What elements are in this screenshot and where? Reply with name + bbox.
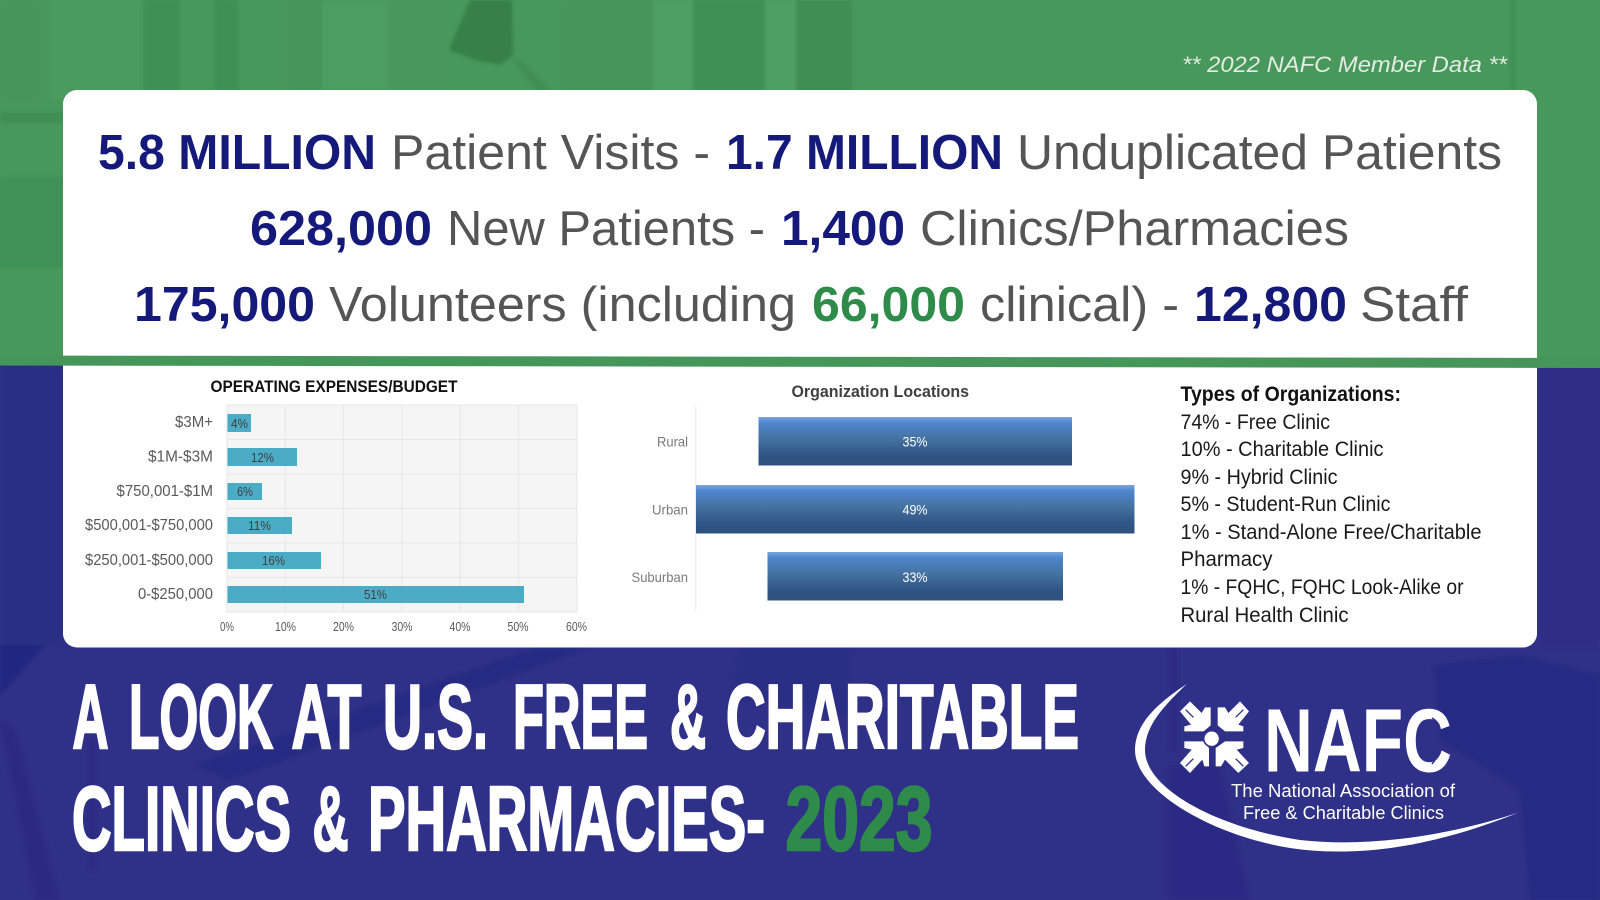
budget bars xyxy=(228,414,524,603)
types of organizations list: 5% - Student-Run Clinic xyxy=(1180,493,1390,516)
green photo background xyxy=(0,0,1600,366)
stat line 1: Unduplicated Patients xyxy=(1017,126,1502,180)
x axis labels: 60% xyxy=(566,620,587,634)
stat line 1: 5.8 MILLION xyxy=(98,126,376,180)
stat line 3: Volunteers (including xyxy=(329,278,796,332)
location labels: Urban xyxy=(652,502,688,518)
stat line 3 xyxy=(134,278,1468,332)
title line 2: & xyxy=(312,769,348,870)
stat line 2: Clinics/Pharmacies xyxy=(920,202,1349,256)
location labels: Suburban xyxy=(632,569,688,585)
title line 2: 2023 xyxy=(786,769,932,870)
budget value labels: 51% xyxy=(364,587,387,602)
types of organizations list: 74% - Free Clinic xyxy=(1180,411,1330,434)
logo tagline: Free & Charitable Clinics xyxy=(1243,802,1444,823)
blue photo background xyxy=(0,365,1600,900)
location values: 49% xyxy=(902,502,928,518)
data source note: ** 2022 NAFC Member Data ** xyxy=(1182,52,1509,77)
title line 1: CHARITABLE xyxy=(726,667,1079,768)
budget value labels: 4% xyxy=(231,416,248,431)
bar chart: operating expenses/budget xyxy=(85,377,587,634)
types of organizations list: Types of Organizations: xyxy=(1180,383,1401,406)
types of organizations list xyxy=(1180,383,1482,627)
x axis labels: 0% xyxy=(220,620,234,634)
white card xyxy=(63,90,1537,648)
stat line 2: 628,000 xyxy=(250,202,432,256)
x axis labels: 30% xyxy=(392,620,412,634)
types of organizations list: 1% - Stand-Alone Free/Charitable xyxy=(1180,521,1482,544)
location values: 33% xyxy=(902,569,928,585)
x axis labels: 10% xyxy=(275,620,296,634)
location values xyxy=(902,434,928,585)
x axis labels: 50% xyxy=(508,620,528,634)
stat line 3: 12,800 xyxy=(1194,278,1347,332)
budget category labels: $750,001-$1M xyxy=(116,483,213,500)
key statistics xyxy=(98,126,1502,332)
budget category labels: $1M-$3M xyxy=(148,448,213,466)
green divider bar xyxy=(0,356,1600,368)
types of organizations list: 10% - Charitable Clinic xyxy=(1180,438,1384,461)
bar chart: organization locations xyxy=(632,382,1134,610)
logo tagline: The National Association of xyxy=(1231,780,1456,801)
logo swoosh xyxy=(1135,684,1518,852)
budget category labels: 0-$250,000 xyxy=(138,586,213,603)
title line 1: FREE xyxy=(513,667,648,768)
budget category labels: $250,001-$500,000 xyxy=(85,552,213,569)
chart title: OPERATING EXPENSES/BUDGET xyxy=(210,377,458,396)
logo wordmark: NAFC xyxy=(1264,692,1452,792)
budget value labels: 12% xyxy=(251,450,274,465)
axis line xyxy=(695,407,696,610)
logo arrows icon xyxy=(1180,701,1249,773)
budget value labels xyxy=(231,416,387,602)
x axis labels: 20% xyxy=(333,620,354,634)
x axis labels xyxy=(220,620,587,634)
stat line 1 xyxy=(98,126,1502,180)
budget value labels: 16% xyxy=(262,553,285,568)
title line 1: LOOK xyxy=(129,667,273,768)
NAFC logo xyxy=(1135,684,1518,852)
title line 1: U.S. xyxy=(383,667,488,768)
title line 2: PHARMACIES- xyxy=(368,769,765,870)
title line 1: A xyxy=(72,667,108,768)
title line 2 xyxy=(72,769,932,870)
stat line 2 xyxy=(250,202,1349,256)
stat line 3: Staff xyxy=(1360,278,1468,332)
budget value labels: 6% xyxy=(237,484,253,499)
location labels: Rural xyxy=(657,434,688,450)
types of organizations list: Pharmacy xyxy=(1180,548,1273,571)
location labels xyxy=(632,434,688,585)
logo tagline xyxy=(1231,780,1456,823)
title line 1: AT xyxy=(292,667,362,768)
budget category labels: $500,001-$750,000 xyxy=(85,517,213,534)
stat line 2: 1,400 xyxy=(781,202,905,256)
stat line 1: Patient Visits - xyxy=(391,126,710,180)
stat line 3: clinical) - xyxy=(980,278,1179,332)
stat line 3: 175,000 xyxy=(134,278,315,332)
main title xyxy=(72,667,1079,870)
location bars xyxy=(696,417,1134,600)
budget value labels: 11% xyxy=(248,518,271,533)
x axis labels: 40% xyxy=(450,620,470,634)
stat line 2: New Patients - xyxy=(447,202,765,256)
chart title: Organization Locations xyxy=(792,382,969,401)
location values: 35% xyxy=(902,434,928,450)
stat line 1: 1.7 MILLION xyxy=(726,126,1003,180)
budget category labels xyxy=(85,414,213,603)
title line 1 xyxy=(72,667,1079,768)
types of organizations list: 1% - FQHC, FQHC Look-Alike or xyxy=(1180,576,1464,599)
types of organizations list: Rural Health Clinic xyxy=(1180,604,1348,627)
plot area xyxy=(227,405,577,612)
title line 2: CLINICS xyxy=(72,769,291,870)
types of organizations list: 9% - Hybrid Clinic xyxy=(1180,466,1338,489)
stat line 3: 66,000 xyxy=(812,278,965,332)
title line 1: & xyxy=(670,667,706,768)
budget category labels: $3M+ xyxy=(175,414,213,431)
